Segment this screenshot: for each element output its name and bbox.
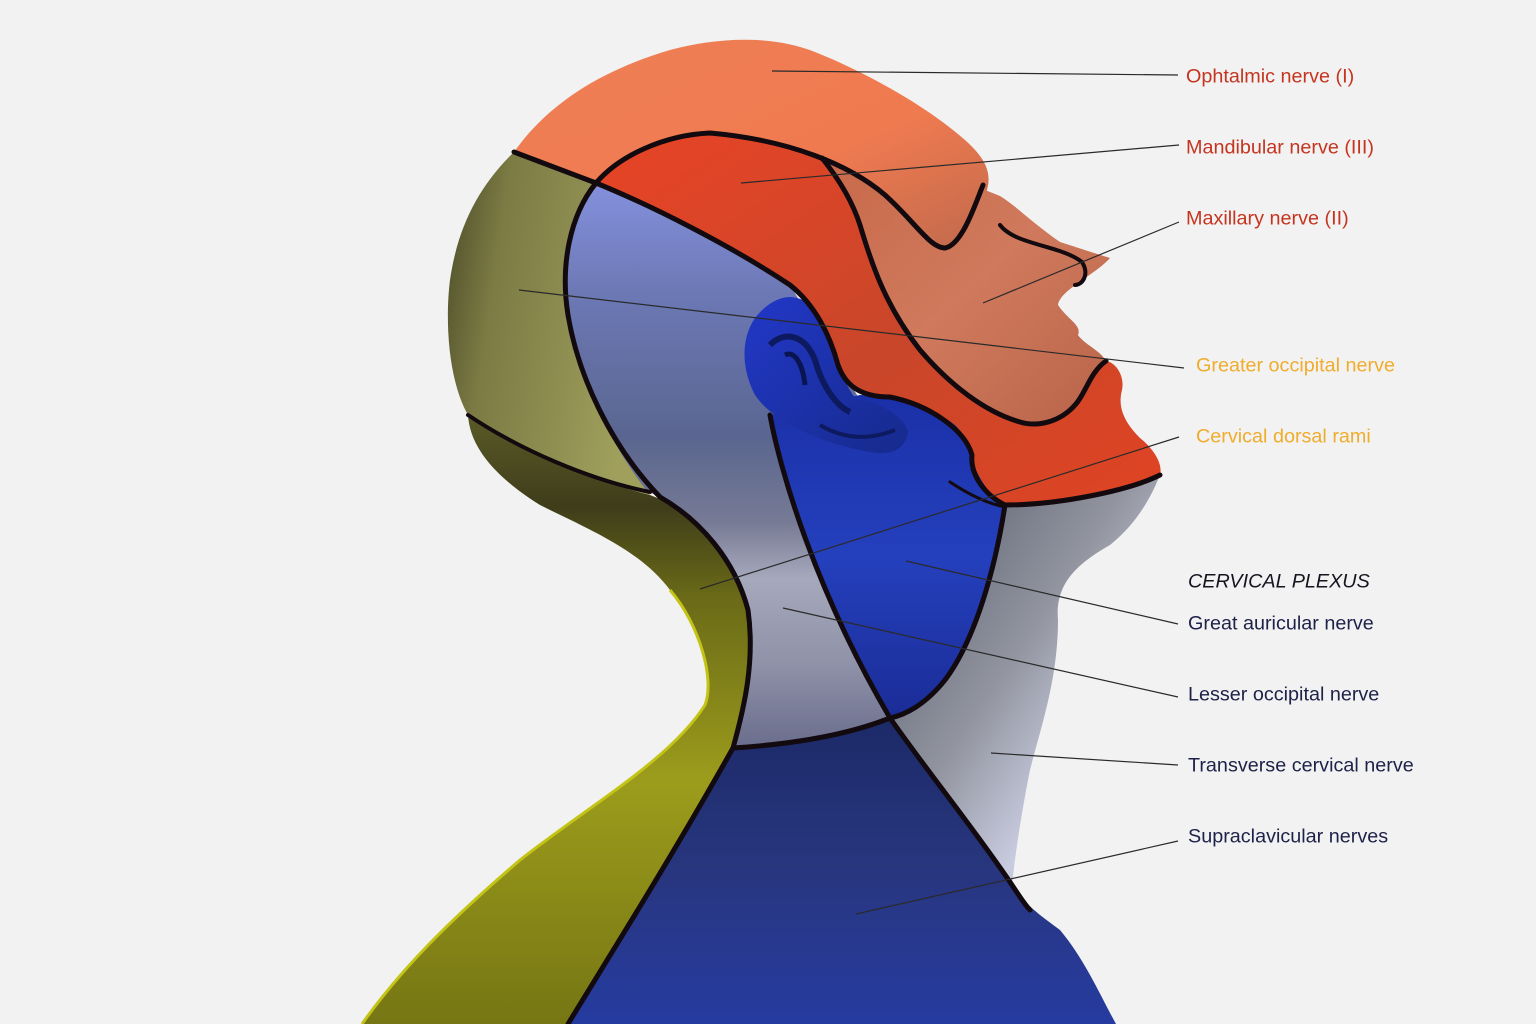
label: great auricular nerve: Great auricular nerve: [1188, 612, 1374, 634]
labels: cervical plexus nerves: [1188, 612, 1414, 848]
head and neck regions: [362, 40, 1161, 1024]
region: maxillary nerve: [822, 158, 1110, 424]
label: greater occipital nerve: Greater occipital nerve: [1196, 354, 1395, 376]
label: supraclavicular nerves: Supraclavicular nerves: [1188, 826, 1388, 848]
yellow rim of the nape: [362, 590, 708, 1024]
heading: cervical plexus: CERVICAL PLEXUS: [1188, 570, 1370, 592]
region: great auricular nerve: [770, 395, 1005, 718]
region: mandibular nerve: [596, 133, 1161, 505]
region: cervical dorsal rami: [362, 415, 749, 1024]
label: lesser occipital nerve: Lesser occipital nerve: [1188, 684, 1379, 706]
label: mandibular nerve: Mandibular nerve (III): [1186, 136, 1374, 158]
label: transverse cervical nerve: Transverse cervical nerve: [1188, 754, 1414, 776]
label: ophthalmic nerve: Ophtalmic nerve (I): [1186, 66, 1354, 88]
region: transverse cervical nerve: [890, 475, 1160, 885]
region: supraclavicular nerves: [568, 718, 1116, 1024]
region: lesser occipital nerve: [565, 183, 890, 748]
icon: ear: [744, 297, 908, 453]
region: ophthalmic nerve: [514, 40, 989, 248]
region: greater occipital nerve: [448, 152, 650, 495]
labels: dorsal nerves: [1196, 354, 1395, 448]
labels: trigeminal nerve branches: [1186, 66, 1374, 230]
label: cervical dorsal rami: Cervical dorsal rami: [1196, 426, 1371, 448]
nerve boundary lines: [468, 133, 1160, 1024]
leader lines: [519, 71, 1184, 914]
label: maxillary nerve: Maxillary nerve (II): [1186, 208, 1349, 230]
